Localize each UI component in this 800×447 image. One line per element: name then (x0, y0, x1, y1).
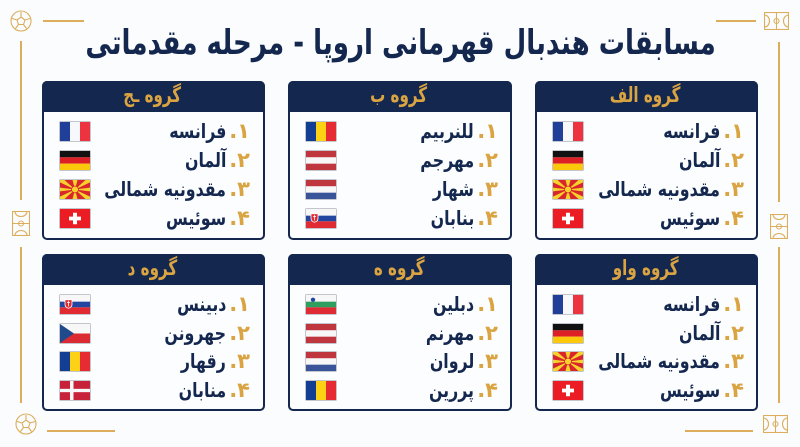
row: first team (306, 119, 498, 143)
row: Germany (552, 148, 744, 172)
row: third team: شهار (433, 177, 474, 201)
row: second team: مهرجم (420, 148, 474, 172)
row: second team: ۲. (477, 321, 498, 345)
decoration: top-left ball (10, 10, 32, 32)
row: fourth team: پررین (429, 378, 474, 402)
row: France: فرانسه (169, 119, 226, 143)
row: Switzerland: ۴. (723, 378, 744, 402)
heading: group jim (42, 81, 265, 112)
decoration: left court (12, 211, 30, 236)
decoration: left vertical line top (20, 41, 22, 200)
row: fourth team: ۴. (229, 378, 250, 402)
row: first team (306, 292, 498, 316)
row: second team (60, 321, 250, 345)
panel: group vav (535, 254, 758, 411)
row: France: فرانسه (663, 119, 720, 143)
decoration: right court (770, 214, 788, 239)
row: France: ۱. (229, 119, 250, 143)
row: France (60, 119, 250, 143)
row: first team: دبینس (177, 292, 226, 316)
row: North Macedonia: ۳. (229, 177, 250, 201)
row: Switzerland (60, 206, 250, 230)
heading: group vav (535, 254, 758, 285)
row: first team: دبلین (433, 292, 474, 316)
row: Switzerland (552, 378, 744, 402)
row: first team (60, 292, 250, 316)
row: Germany: ۲. (723, 148, 744, 172)
row: North Macedonia (552, 349, 744, 373)
heading: group be: گروه ب (371, 83, 427, 107)
decoration: bottom-left line (47, 430, 115, 432)
row: France (552, 119, 744, 143)
heading: group alef: گروه الف (610, 83, 681, 107)
row: Germany: آلمان (185, 148, 226, 172)
row: Germany: ۲. (229, 148, 250, 172)
row: second team: مهرنم (426, 321, 474, 345)
heading: group vav: گروه واو (613, 256, 678, 280)
row: first team: ۱. (229, 292, 250, 316)
row: third team: رقهار (181, 349, 226, 373)
row: North Macedonia: مقدونیه شمالی (598, 349, 720, 373)
row: second team: جهرونن (164, 321, 226, 345)
row: second team (306, 148, 498, 172)
heading: group he (288, 254, 512, 285)
panel: group jim (42, 81, 265, 240)
row: third team (306, 177, 498, 201)
row: third team: ۳. (229, 349, 250, 373)
row: Switzerland: ۴. (723, 206, 744, 230)
decoration: top-right court (764, 12, 789, 30)
row: fourth team (306, 378, 498, 402)
heading: group he: گروه ه (374, 256, 424, 280)
decoration: top-left line (43, 20, 84, 22)
row: Switzerland (552, 206, 744, 230)
row: North Macedonia: ۳. (723, 349, 744, 373)
row: fourth team (306, 206, 498, 230)
row: North Macedonia: مقدونیه شمالی (104, 177, 226, 201)
decoration: right vertical line top (778, 42, 780, 202)
decoration: right vertical line bottom (778, 247, 780, 403)
row: France: فرانسه (663, 292, 720, 316)
row: first team: ۱. (477, 119, 498, 143)
row: Germany: آلمان (679, 321, 720, 345)
row: fourth team: بنابان (430, 206, 474, 230)
row: France (552, 292, 744, 316)
title: مسابقات هندبال قهرمانی اروپا - مرحله مقدماتی (85, 23, 716, 63)
decoration: bottom-right line (685, 430, 753, 432)
row: France: ۱. (723, 292, 744, 316)
row: Germany: آلمان (679, 148, 720, 172)
row: third team: ۳. (477, 349, 498, 373)
row: North Macedonia (552, 177, 744, 201)
row: North Macedonia: ۳. (723, 177, 744, 201)
row: third team: ۳. (477, 177, 498, 201)
row: fourth team: ۴. (477, 206, 498, 230)
row: first team: للنربیم (421, 119, 474, 143)
panel: group alef (535, 81, 758, 240)
row: fourth team (60, 378, 250, 402)
row: North Macedonia: مقدونیه شمالی (598, 177, 720, 201)
row: second team (306, 321, 498, 345)
row: fourth team: منابان (178, 378, 226, 402)
row: Switzerland: سوئیس (660, 206, 720, 230)
row: second team: ۲. (229, 321, 250, 345)
heading: group dal: گروه د (128, 256, 177, 280)
heading: group jim: گروه ـج (124, 83, 181, 107)
decoration: bottom-left ball (15, 414, 36, 434)
panel: group he (288, 254, 512, 411)
row: third team: لروان (430, 349, 474, 373)
row: Germany (60, 148, 250, 172)
row: North Macedonia (60, 177, 250, 201)
decoration: bottom-right court (763, 415, 788, 433)
row: Switzerland: سوئیس (166, 206, 226, 230)
panel: group be (288, 81, 512, 240)
row: first team: ۱. (477, 292, 498, 316)
decoration: left vertical line bottom (20, 247, 22, 403)
row: Germany: ۲. (723, 321, 744, 345)
row: Germany (552, 320, 744, 345)
heading: group alef (535, 81, 758, 112)
row: Switzerland: ۴. (229, 206, 250, 230)
panel: group dal (42, 254, 265, 411)
row: France: ۱. (723, 119, 744, 143)
row: third team (306, 349, 498, 373)
row: third team (60, 349, 250, 373)
row: second team: ۲. (477, 148, 498, 172)
row: Switzerland: سوئیس (660, 378, 720, 402)
heading: group dal (42, 254, 265, 285)
decoration: top-right line (716, 20, 756, 22)
heading: group be (288, 81, 512, 112)
row: fourth team: ۴. (477, 378, 498, 402)
